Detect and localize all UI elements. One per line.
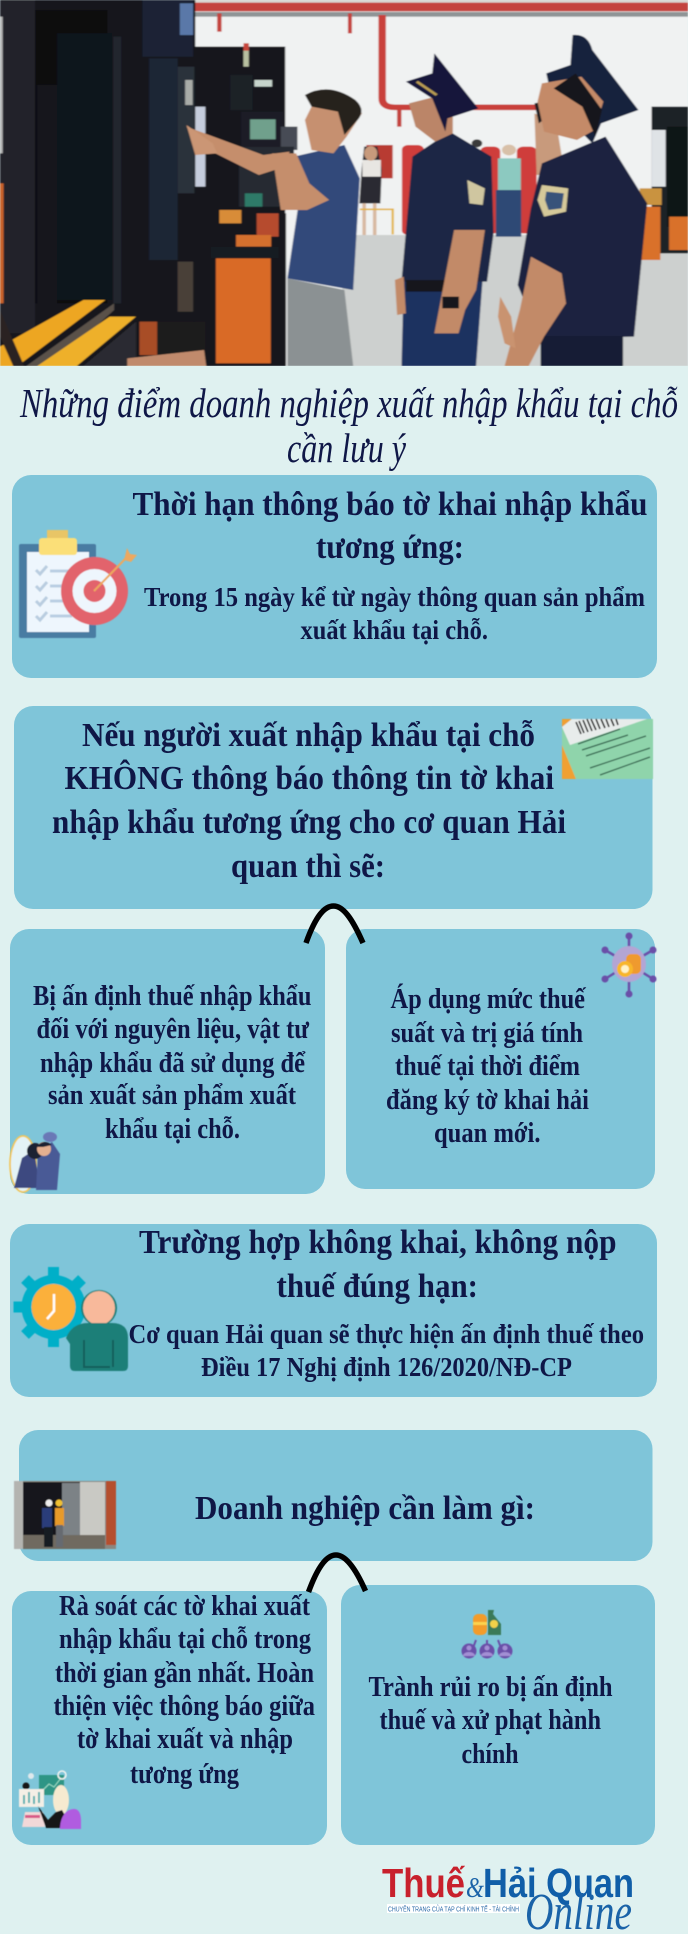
logo: Thuế & Hải Quan Online: Thuế xyxy=(382,1860,465,1906)
panel: what businesses should do xyxy=(14,1430,652,1561)
heading xyxy=(132,486,648,566)
central machine xyxy=(193,47,285,366)
woman behind xyxy=(534,113,563,175)
icon: coins with network xyxy=(602,932,656,998)
body text: tờ khai xuất và nhập xyxy=(77,1724,293,1755)
body text: thuế tại thời điểm xyxy=(395,1051,580,1082)
worker xyxy=(186,127,290,175)
icon: gear clock and person xyxy=(14,1267,128,1371)
body text: nhập khẩu đã sử dụng để xyxy=(40,1048,306,1079)
body text: Trành rủi ro bị ấn định xyxy=(368,1672,613,1703)
body text: Điều 17 Nghị định 126/2020/NĐ-CP xyxy=(201,1351,572,1382)
body text xyxy=(386,984,589,1149)
body text: khẩu tại chỗ. xyxy=(105,1114,240,1145)
heading: Nếu người xuất nhập khẩu tại chỗ xyxy=(82,717,535,754)
heading xyxy=(52,717,566,885)
logo: Thuế & Hải Quan Online: & xyxy=(466,1873,484,1904)
body text: đối với nguyên liệu, vật tư xyxy=(36,1014,310,1045)
body text xyxy=(368,1672,613,1770)
body text xyxy=(128,1318,644,1382)
right machine xyxy=(652,107,688,253)
body text: thiện việc thông báo giữa xyxy=(54,1691,315,1722)
body text: thuế và xử phạt hành xyxy=(380,1705,601,1736)
icon: shipping container photo xyxy=(14,1481,116,1549)
heading: tương ứng: xyxy=(316,529,464,566)
body text: xuất khẩu tại chỗ. xyxy=(300,614,488,645)
officer left xyxy=(401,279,483,366)
heading: Thời hạn thông báo tờ khai nhập khẩu xyxy=(132,486,648,523)
icon: clipboard and target xyxy=(19,530,137,638)
heading xyxy=(139,1224,616,1305)
body text: đăng ký tờ khai hải xyxy=(386,1085,589,1116)
icon: woman analysing charts xyxy=(19,1771,81,1829)
officer right xyxy=(546,35,638,143)
panel: late filing xyxy=(10,1224,657,1397)
panel: tax assessment xyxy=(10,929,325,1194)
body text: Áp dụng mức thuế xyxy=(390,984,586,1015)
body text: Rà soát các tờ khai xuất xyxy=(59,1591,311,1622)
title xyxy=(19,380,678,471)
heading: nhập khẩu tương ứng cho cơ quan Hải xyxy=(52,804,566,841)
panel: review declarations xyxy=(12,1591,327,1845)
panel: consequence heading xyxy=(14,706,653,909)
orange trays xyxy=(0,300,105,366)
title: cần lưu ý xyxy=(287,425,407,471)
header photo: customs officers inspecting a machine xyxy=(0,0,688,366)
logo: Thuế & Hải Quan Online: CHUYÊN TRANG CỦA TẠP CHÍ KINH TẾ - TÀI CHÍNH xyxy=(388,1904,519,1914)
heading: KHÔNG thông báo thông tin tờ khai xyxy=(64,759,554,797)
logo: Thuế & Hải Quan Online xyxy=(382,1860,634,1934)
left machine xyxy=(0,0,195,366)
body text: suất và trị giá tính xyxy=(391,1018,583,1049)
body text xyxy=(144,581,645,645)
icon: customs declaration form xyxy=(562,719,653,779)
heading: Trường hợp không khai, không nộp xyxy=(139,1224,616,1261)
body text: quan mới. xyxy=(434,1118,540,1149)
body text xyxy=(54,1591,315,1790)
body text: chính xyxy=(462,1739,519,1770)
icon: worried woman at mirror xyxy=(10,1132,60,1192)
logo: Thuế & Hải Quan Online: Hải Quan xyxy=(483,1860,634,1906)
heading: Doanh nghiệp cần làm gì: xyxy=(195,1490,535,1527)
body text: sản xuất sản phẩm xuất xyxy=(48,1080,297,1111)
body text: thời gian gần nhất. Hoàn xyxy=(55,1658,314,1689)
icon: money distributed to people xyxy=(462,1610,512,1658)
panel: avoid penalties xyxy=(341,1585,655,1845)
connector arc 1 xyxy=(306,906,363,943)
body text xyxy=(33,981,312,1145)
panel: notification deadline xyxy=(12,475,657,678)
body text: Trong 15 ngày kể từ ngày thông quan sản phẩm xyxy=(144,581,645,612)
body text: Bị ấn định thuế nhập khẩu xyxy=(33,981,312,1012)
body text: tương ứng xyxy=(130,1759,239,1790)
wall fire cylinders and bystanders xyxy=(402,145,424,235)
panel: tax rate xyxy=(346,929,656,1189)
heading: thuế đúng hạn: xyxy=(276,1268,478,1305)
body text: nhập khẩu tại chỗ trong xyxy=(59,1624,311,1655)
connector arc 2 xyxy=(308,1555,366,1592)
heading: quan thì sẽ: xyxy=(231,848,385,885)
